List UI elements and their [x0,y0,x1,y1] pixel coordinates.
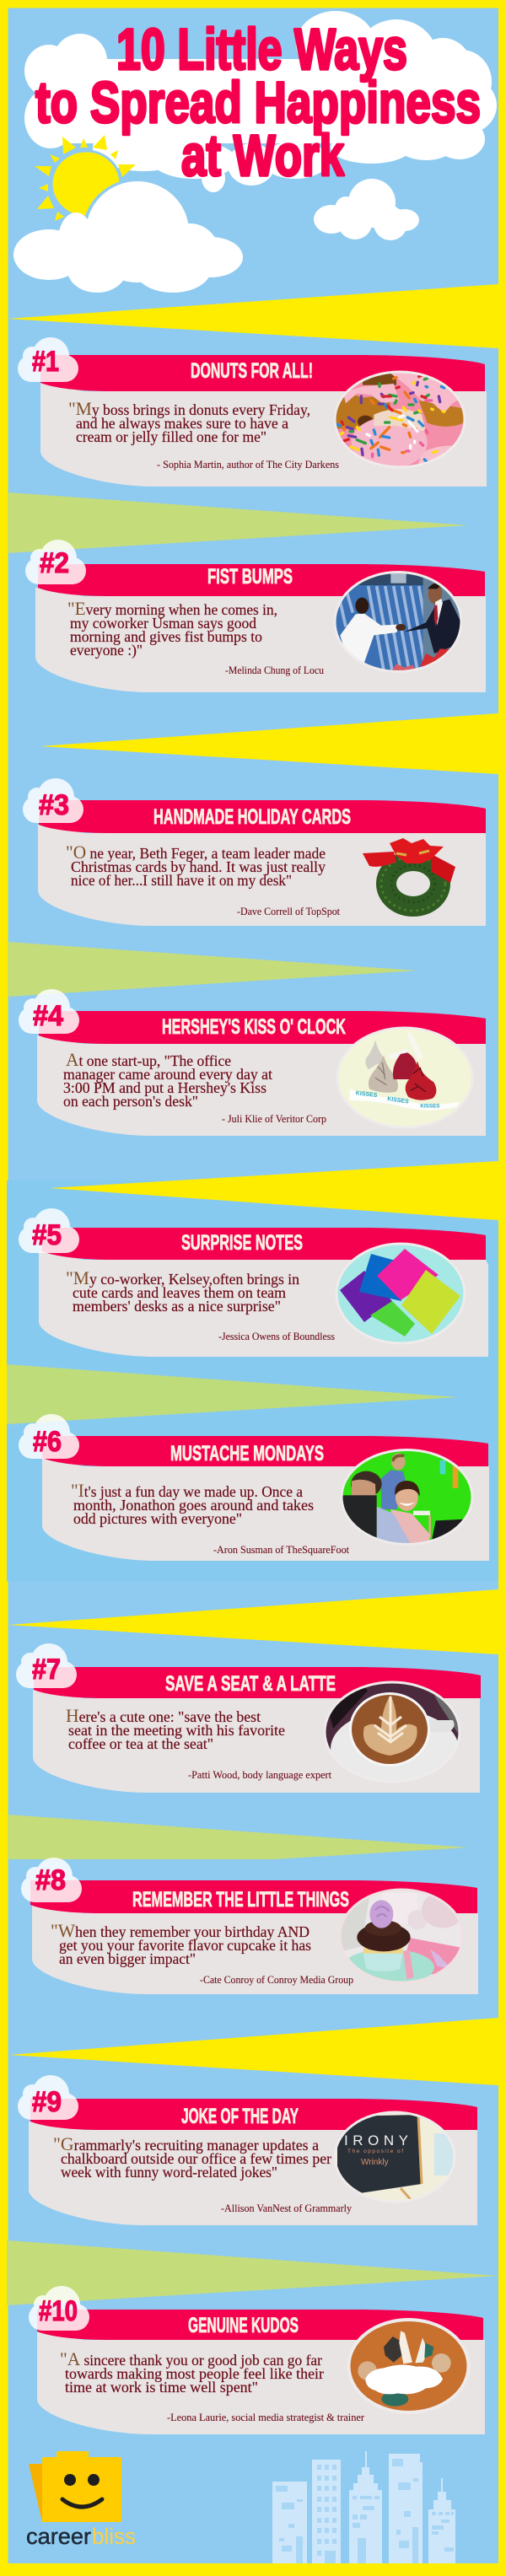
panel: #2 fist bumps [25,540,486,692]
heading: SAVE A SEAT & A LATTE [165,1672,336,1696]
card body [37,2331,485,2434]
photo: kisses: KISSES [355,1090,378,1099]
title [35,17,481,188]
building 4 [389,2454,423,2563]
quote: time at work is time well spent" [65,2379,258,2396]
building 5 [428,2478,455,2563]
photo: coworkers [342,1449,471,1543]
building 2 [312,2460,341,2563]
photo: sticky notes [337,1243,464,1342]
sky panel tint section [7,1180,498,1581]
quote: on each person's desk" [63,1093,198,1110]
heading: SURPRISE NOTES [181,1231,303,1255]
number cloud [29,2286,89,2331]
card body [32,1905,478,1994]
card heading band [39,800,486,833]
card heading band [30,2099,477,2130]
panel: #1 donuts for all [18,337,487,487]
number cloud [19,1208,79,1253]
quote [60,2348,324,2396]
quote: manager came around every day at [63,1066,272,1083]
card body [39,1251,488,1357]
panel: #8 remember the little things [21,1858,478,1994]
card body [35,588,486,692]
quote [66,842,326,889]
panel: #9 joke of the day [18,2075,477,2225]
number: #1 [32,346,59,378]
stripe: yellow wedge 2 [40,713,498,774]
panel: #7 save a seat and a latte [16,1643,481,1793]
quote [71,1480,314,1527]
attribution: -Aron Susman of TheSquareFoot [213,1543,349,1556]
photo: kisses [339,1027,471,1127]
quote: my coworker Usman says good [70,615,256,632]
panel: #3 handmade holiday cards [23,778,486,926]
card body [38,825,486,926]
number: #6 [33,1426,62,1458]
photo: fist bump [336,571,460,670]
card heading band [40,355,485,391]
photo: chalkboard: The opposite of [347,2148,403,2154]
quote: Here's a cute one: "save the best [66,1705,261,1726]
quote: "When they remember your birthday AND [51,1920,310,1941]
card body [40,383,487,487]
title: 10 Little Ways [116,17,407,82]
quote: week with funny word-related jokes" [61,2164,277,2181]
heading: REMEMBER THE LITTLE THINGS [132,1888,349,1912]
stripe: yellow wedge 4 [8,1589,498,1654]
quote: At one start-up, "The office [66,1049,231,1070]
attribution: -Cate Conroy of Conroy Media Group [200,1973,353,1986]
quote: odd pictures with everyone" [73,1510,242,1527]
quote: get you your favorite flavor cupcake it has [59,1937,311,1954]
stripe: green wedge 3 [7,1364,458,1424]
number cloud [19,1414,79,1459]
photo: chalkboard [333,2110,456,2204]
quote: 3:00 PM and put a Hershey's Kiss [63,1079,266,1096]
number: #3 [39,789,69,821]
quote [51,1920,311,1967]
card heading band [42,1228,486,1260]
quote [63,1049,272,1110]
photo: latte [326,1681,459,1767]
attribution: -Allison VanNest of Grammarly [221,2202,352,2214]
number cloud [16,1643,77,1688]
logo: careerbliss folder smiley [26,2451,136,2549]
quote: cute cards and leaves them on team [73,1284,286,1301]
photo: kisses: KISSES [420,1103,440,1109]
number cloud [18,2075,78,2120]
stripe: yellow wedge 5 [9,2018,498,2085]
quote: coffee or tea at the seat" [68,1735,213,1752]
photo: thumbs up [351,2318,467,2411]
quote: Christmas cards by hand. It was just really [71,858,326,875]
card body [33,1690,480,1793]
panel: #5 surprise notes [19,1208,488,1357]
photo: chalkboard: Wrinkly [361,2158,389,2167]
heading: HANDMADE HOLIDAY CARDS [153,805,351,829]
attribution: -Leona Laurie, social media strategist & trainer [167,2411,365,2423]
quote: "Grammarly's recruiting manager updates a [53,2133,319,2154]
building 1 [272,2482,307,2563]
number: #2 [40,547,69,579]
quote [66,1267,299,1315]
quote: and he always makes sure to have a [76,415,288,432]
building 3 [349,2451,382,2563]
quote [66,1705,285,1752]
photo: wreath [363,838,455,911]
quote: morning and gives fist bumps to [70,628,262,645]
number: #7 [32,1654,61,1686]
photo: chalkboard: IRONY [344,2132,408,2148]
number cloud [23,778,83,823]
number cloud [25,540,86,584]
city skyline [272,2451,455,2563]
panel: #4 hershey's kiss o'clock [19,989,486,1136]
number: #8 [35,1864,66,1896]
attribution: - Sophia Martin, author of The City Darkens [157,458,339,471]
header cloud: large behind title [24,11,497,192]
card heading band [37,2310,483,2340]
quote: "O ne year, Beth Feger, a team leader made [66,842,326,863]
heading: HERSHEY'S KISS O' CLOCK [162,1015,346,1039]
card body [42,1458,489,1561]
card heading band [39,1011,486,1044]
attribution: -Patti Wood, body language expert [188,1768,331,1781]
attribution: -Dave Correll of TopSpot [237,905,340,917]
panel: #10 genuine kudos [29,2286,485,2434]
quote: "It's just a fun day we made up. Once a [71,1480,303,1501]
quote [67,598,277,659]
number: #5 [32,1219,62,1251]
card heading band [42,1436,488,1466]
quote [68,398,310,445]
quote: chalkboard outside our office a few times per [61,2150,331,2167]
quote: members' desks as a nice surprise" [73,1298,281,1315]
attribution: -Melinda Chung of Locu [225,664,324,676]
card heading band [34,1667,481,1698]
card heading band [38,564,485,596]
card body [29,2122,477,2225]
cloud: left below title [13,179,243,293]
number: #4 [33,1000,63,1032]
card body [37,1035,486,1136]
heading: DONUTS FOR ALL! [191,359,313,383]
quote: towards making most people feel like their [65,2365,324,2382]
quote: everyone :)" [70,642,143,659]
quote: seat in the meeting with his favorite [68,1722,285,1739]
heading: FIST BUMPS [207,565,293,589]
quote: "A sincere thank you or good job can go far [60,2348,322,2369]
stripe: green wedge 5 [7,2240,498,2305]
number cloud [19,989,79,1034]
attribution: - Juli Klie of Veritor Corp [222,1112,326,1125]
photo: cupcake [341,1889,460,1982]
panel: #6 mustache mondays [19,1414,489,1561]
stripe: green wedge 1 [8,492,468,553]
quote: month, Jonathon goes around and takes [73,1497,314,1514]
logo: careerbliss folder smiley: bliss [92,2524,136,2549]
heading: JOKE OF THE DAY [181,2105,299,2128]
quote: an even bigger impact" [59,1950,196,1967]
number: #9 [32,2086,62,2118]
quote: "My boss brings in donuts every Friday, [68,398,310,419]
quote: "My co-worker, Kelsey,often brings in [66,1267,299,1288]
title: at Work [181,123,344,188]
card heading band [30,1880,477,1913]
quote: cream or jelly filled one for me" [76,428,266,445]
number cloud [21,1858,82,1902]
logo: careerbliss folder smiley: career [26,2524,91,2549]
heading: MUSTACHE MONDAYS [170,1442,324,1465]
stripe: yellow wedge 1 [8,284,498,348]
quote: nice of her...I still have it on my desk" [71,872,292,889]
icon: sun [35,135,136,221]
heading: GENUINE KUDOS [188,2314,299,2337]
stripe: green wedge 4 [8,1815,468,1859]
number: #10 [39,2295,78,2327]
photo: kisses: KISSES [387,1096,409,1105]
quote: "Every morning when he comes in, [67,598,277,619]
photo: donuts [336,371,464,465]
cloud: small right [314,179,419,240]
stripe: green wedge 2 [8,942,417,997]
quote [53,2133,331,2181]
number cloud [18,337,78,382]
attribution: -Jessica Owens of Boundless [218,1330,335,1342]
stripe: yellow wedge 3 [50,1161,498,1220]
